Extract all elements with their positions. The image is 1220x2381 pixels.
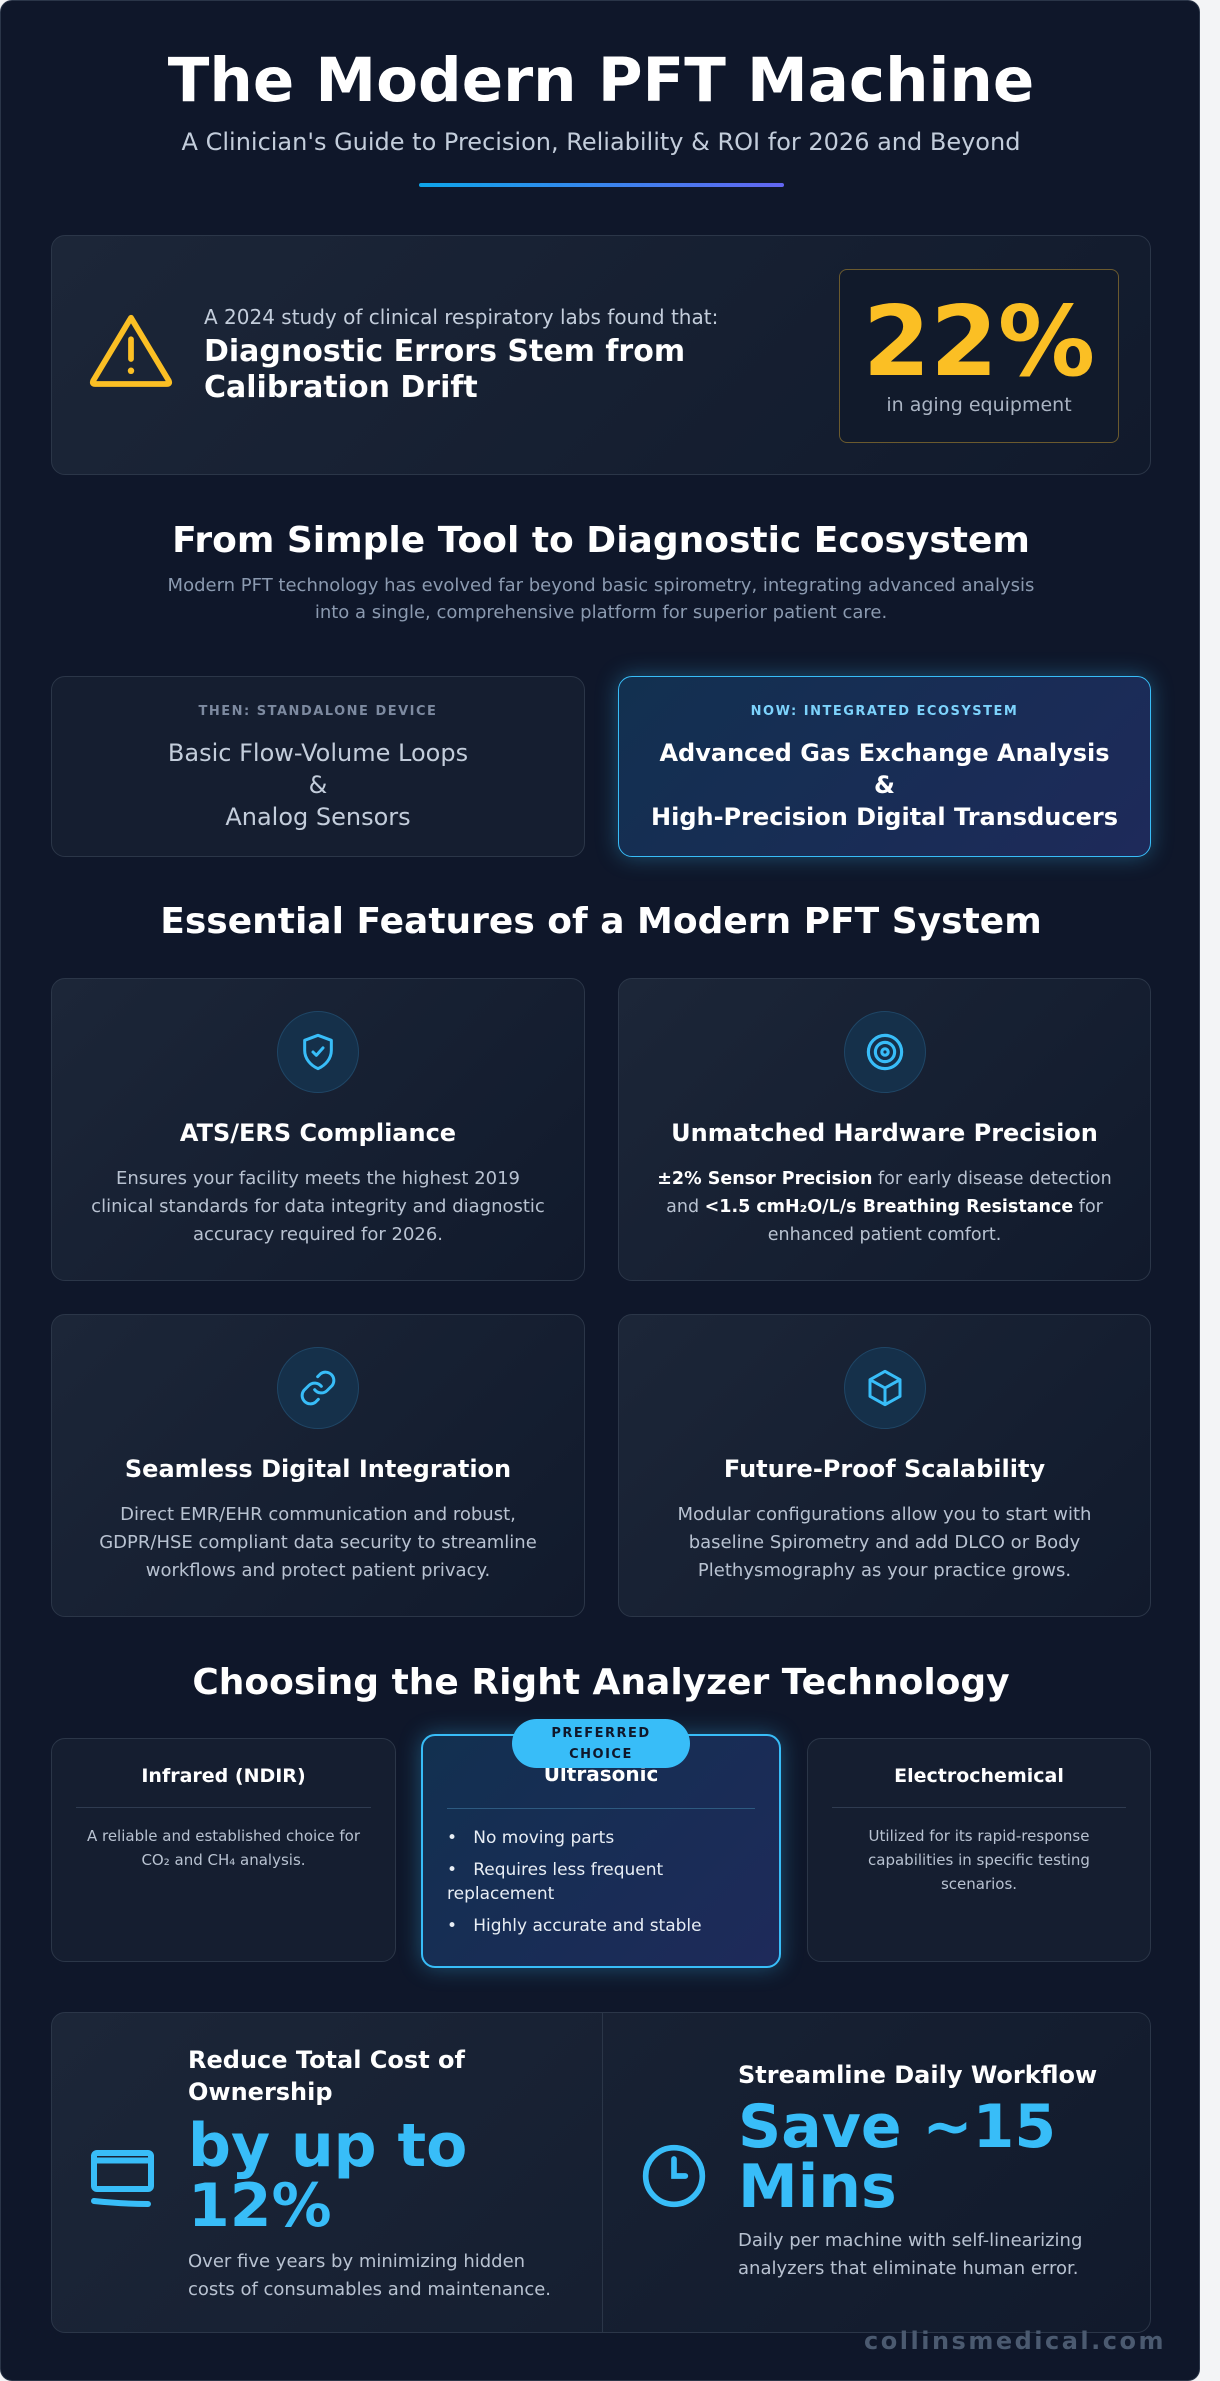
panel: ROI	[51, 2012, 1151, 2333]
panel: now: Advanced Gas Exchange Analysis	[659, 739, 1110, 767]
text: study: A 2024 study of clinical respiratory labs found that:	[204, 305, 718, 329]
text: headline: Diagnostic Errors Stem from	[204, 334, 685, 369]
watermark: collinsmedical.com	[864, 2327, 1166, 2355]
panel: precision: ±2% Sensor Precision for early disease detection and <1.5 cmH₂O/L/s Breathing Resistance for enhanced patient comfort.	[657, 1169, 1112, 1245]
panel: then: Basic Flow-Volume Loops	[168, 739, 468, 767]
stat box: 22%	[863, 285, 1095, 398]
text: headline: Calibration Drift	[204, 370, 478, 405]
text: ecosystem description: into a single, comprehensive platform for superior patient care.	[315, 602, 887, 623]
accent line	[419, 183, 784, 187]
subtitle: A Clinician's Guide to Precision, Reliability & ROI for 2026 and Beyond	[182, 128, 1020, 156]
divider	[602, 2013, 603, 2332]
heading: features: Essential Features of a Modern PFT System	[160, 901, 1042, 942]
title: The Modern PFT Machine	[168, 45, 1034, 116]
panel: integration: Direct EMR/EHR communication and robust, GDPR/HSE compliant data security to streamline workflows and protect patient privacy.	[99, 1504, 537, 1581]
stat box	[839, 269, 1119, 443]
icon: cube	[844, 1347, 926, 1429]
stat box: in aging equipment	[886, 394, 1072, 416]
panel: precision: Unmatched Hardware Precision	[671, 1119, 1098, 1147]
panel: ATS/ERS: ATS/ERS Compliance	[180, 1119, 456, 1147]
icon: warning	[90, 314, 172, 387]
panel: infrared: Infrared (NDIR)	[141, 1765, 306, 1787]
panel: scalability: Future-Proof Scalability	[724, 1455, 1045, 1483]
badge: preferred choice: PREFERRED	[551, 1726, 651, 1741]
panel: infrared	[51, 1738, 396, 1962]
text: ecosystem description: Modern PFT technology has evolved far beyond basic spirometry, integrating advanced analysis	[168, 575, 1034, 596]
icon: cost	[91, 2150, 154, 2207]
text: cost: Reduce Total Cost of Ownership	[188, 2046, 465, 2106]
panel: scalability	[618, 1314, 1151, 1617]
panel: ultrasonic: • Requires less frequent replacement	[447, 1860, 663, 1904]
panel: precision	[618, 978, 1151, 1281]
panel: infrared: A reliable and established choice for CO₂ and CH₄ analysis.	[87, 1827, 360, 1869]
panel: now	[618, 676, 1151, 857]
badge: preferred choice	[512, 1719, 690, 1768]
panel: ultrasonic	[421, 1734, 781, 1968]
heading: ecosystem: From Simple Tool to Diagnostic Ecosystem	[172, 520, 1030, 561]
text: headline	[204, 334, 685, 405]
panel: then	[51, 676, 585, 857]
panel: now: NOW: INTEGRATED ECOSYSTEM	[751, 704, 1018, 719]
text: workflow	[738, 2061, 1097, 2279]
panel: electrochemical	[807, 1738, 1151, 1962]
text: workflow: Daily per machine with self-linearizing analyzers that eliminate human error.	[738, 2230, 1082, 2279]
heading: analyzers: Choosing the Right Analyzer Technology	[192, 1662, 1010, 1703]
icon: shield	[277, 1011, 359, 1093]
panel: then: Analog Sensors	[225, 803, 411, 831]
text: cost	[188, 2046, 551, 2300]
panel: scalability: Modular configurations allow you to start with baseline Spirometry and add DLCO or Body Plethysmography as your practice grows.	[678, 1504, 1091, 1581]
badge: preferred choice: CHOICE	[569, 1747, 633, 1762]
icon: target	[844, 1011, 926, 1093]
panel: ultrasonic: Ultrasonic	[544, 1762, 658, 1786]
panel: then: &	[309, 771, 327, 799]
panel: integration	[51, 1314, 585, 1617]
panel: electrochemical: Utilized for its rapid-response capabilities in specific testing scenarios.	[868, 1827, 1090, 1893]
panel: ATS/ERS: Ensures your facility meets the highest 2019 clinical standards for data integrity and diagnostic accuracy required for 2026.	[91, 1168, 545, 1245]
panel: now: High-Precision Digital Transducers	[651, 803, 1118, 831]
icon: link	[277, 1347, 359, 1429]
panel: electrochemical: Electrochemical	[894, 1765, 1064, 1787]
panel: ultrasonic: • Highly accurate and stable	[447, 1916, 702, 1936]
panel: ATS/ERS	[51, 978, 585, 1281]
panel: ultrasonic: • No moving parts	[447, 1828, 614, 1848]
panel: now: &	[874, 771, 895, 799]
text: workflow: Save ~15 Mins	[738, 2092, 1056, 2222]
panel: then: THEN: STANDALONE DEVICE	[199, 704, 437, 719]
icon: clock	[642, 2144, 706, 2208]
panel: integration: Seamless Digital Integration	[125, 1455, 511, 1483]
panel: alert	[51, 235, 1151, 475]
text: workflow: Streamline Daily Workflow	[738, 2061, 1097, 2089]
text: cost: Over five years by minimizing hidden costs of consumables and maintenance.	[188, 2251, 551, 2300]
text: ecosystem description	[168, 575, 1034, 623]
text: cost: by up to 12%	[188, 2111, 467, 2241]
